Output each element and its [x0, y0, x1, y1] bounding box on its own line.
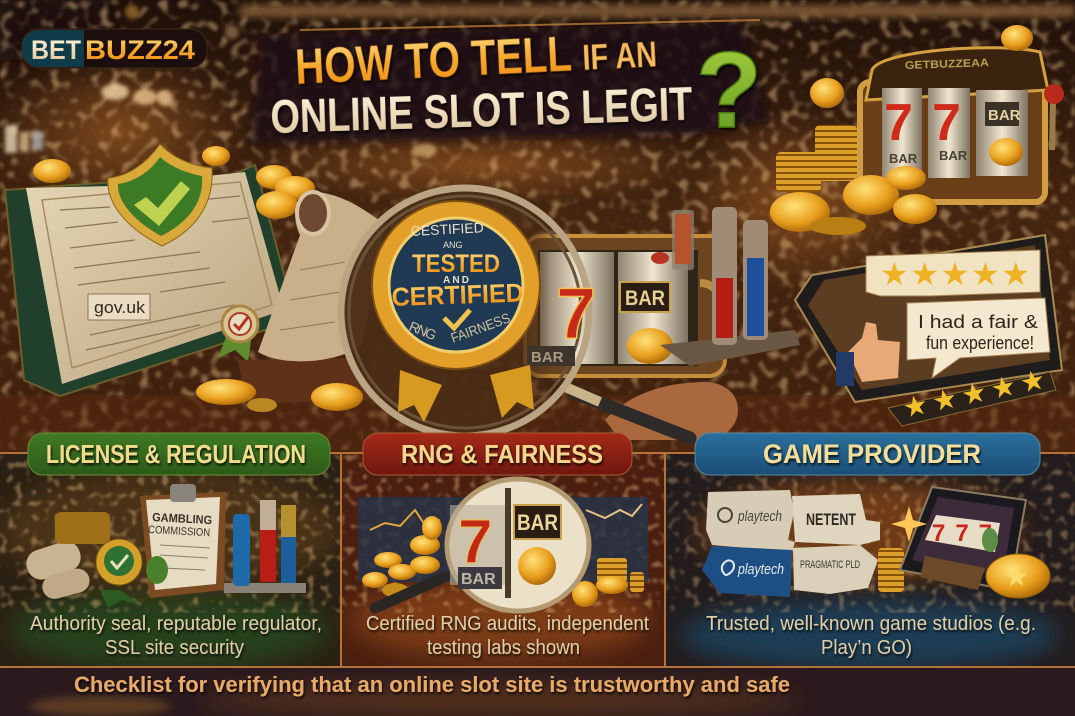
badge ribbons: [398, 365, 534, 422]
review bubble: [907, 298, 1050, 378]
frame lines: [0, 453, 1075, 667]
heading: rng & fairness: RNG & FAIRNESS: [401, 439, 603, 469]
heading: rng & fairness: [363, 433, 632, 475]
mobile phone: 777: [932, 520, 992, 547]
magnified reel bar: BAR: [531, 349, 564, 366]
reel symbols: BAR: [889, 151, 918, 166]
badge: [372, 201, 540, 369]
reel symbols: BAR: [939, 148, 968, 163]
reel symbols: 7: [932, 94, 961, 152]
review phone: [795, 235, 1062, 426]
scroll and wooden base: [196, 192, 385, 412]
question mark: ?: [696, 29, 762, 150]
central reel machine: [525, 236, 725, 376]
caption: rng: testing labs shown: [427, 637, 580, 659]
logo: BetBuzz24: BET: [31, 35, 81, 65]
coins: [362, 516, 644, 607]
logo: BetBuzz24: BUZZ24: [85, 35, 195, 65]
panel: game provider: [666, 453, 1075, 670]
panel: license & regulation: [0, 453, 341, 670]
coin stacks: [770, 125, 937, 235]
badge: ANG: [443, 240, 463, 250]
reel symbols: [884, 94, 1023, 166]
magnified reel bar: [527, 346, 575, 366]
coin with star: [986, 554, 1050, 598]
title line 2: ONLINE SLOT IS LEGIT: [270, 77, 693, 143]
rng illustration: [358, 479, 648, 611]
certificate illustration: [5, 144, 315, 396]
heading: game provider: GAME PROVIDER: [763, 439, 981, 469]
scrolls: [23, 512, 110, 602]
gov.uk label: [88, 294, 150, 320]
badge: CESTIFIED: [410, 219, 484, 239]
clipboard: gambling commission: GAMBLING: [152, 510, 212, 527]
review bubble: I had a fair &: [918, 312, 1038, 332]
heading: license & regulation: LICENSE & REGULATION: [46, 439, 306, 469]
heading: license & regulation: [28, 433, 330, 475]
badge: AND: [443, 275, 469, 286]
ribbon seal: [218, 306, 258, 362]
provider puzzle pieces: PRAGMATIC PLD: [800, 559, 860, 571]
rating bubble: ★★★★★: [880, 256, 1030, 292]
provider puzzle pieces: playtech: [737, 508, 782, 525]
thumbs up: [836, 322, 900, 386]
reel symbols: BAR: [988, 107, 1021, 124]
provider puzzle pieces: playtech: [737, 561, 784, 578]
test tubes: [660, 207, 800, 366]
magnified reel 7: 7: [556, 274, 596, 354]
tubes: [224, 500, 306, 593]
lens: 7: [458, 508, 492, 577]
caption: license: [30, 613, 322, 659]
lens: BAR: [517, 510, 558, 535]
heading: game provider: [695, 433, 1040, 475]
provider puzzle pieces: NETENT: [806, 510, 856, 529]
caption: provider: [706, 613, 1036, 659]
rng chart: [358, 497, 648, 582]
caption: license: SSL site security: [105, 637, 244, 659]
handle: [375, 577, 445, 608]
reel symbols: 7: [884, 94, 913, 152]
clipboard: gambling commission: [140, 484, 226, 598]
license illustration: [23, 484, 306, 608]
footer strip: Checklist for verifying that an online slot site is trustworthy and safe: [74, 672, 790, 697]
coin with star: ★: [1004, 561, 1029, 592]
hand: [605, 382, 738, 440]
logo: BetBuzz24: [22, 29, 207, 68]
lens: BAR: [461, 571, 496, 588]
star strip: ★★★★★: [900, 363, 1048, 424]
reel symbols: [620, 252, 673, 364]
title line 1: HOW TO TELL IF AN: [294, 21, 658, 95]
rating bubble: [866, 250, 1040, 296]
badge: TESTED: [412, 250, 500, 278]
reel symbols: BAR: [625, 287, 665, 310]
slot machine top right: [810, 25, 1064, 202]
gov.uk label: gov.uk: [94, 298, 146, 317]
lens: [447, 479, 589, 611]
mobile phone: [900, 487, 1026, 590]
footer strip: [0, 668, 1075, 716]
magnifier with certified badge: [341, 188, 738, 440]
authority seal: [96, 539, 168, 608]
badge: CERTIFIED: [391, 277, 524, 312]
review bubble: fun experience!: [926, 333, 1034, 353]
badge: RNG: [407, 318, 439, 343]
caption: license: Authority seal, reputable regulator,: [30, 613, 322, 635]
title banner: [250, 20, 770, 144]
caption: rng: Certified RNG audits, independent: [366, 613, 649, 635]
provider puzzle pieces: [702, 490, 904, 597]
caption: provider: Play’n GO): [821, 637, 912, 659]
slot machine top right: GETBUZZEAA: [905, 57, 989, 72]
coins near certificate: [33, 146, 315, 219]
shield with check: [108, 144, 212, 246]
clipboard: gambling commission: COMMISSION: [148, 524, 210, 539]
panel: rng & fairness: [342, 453, 665, 667]
caption: rng: [366, 613, 649, 659]
badge: FAIRNESS: [449, 310, 512, 346]
caption: provider: Trusted, well-known game studios (e.g.: [706, 613, 1036, 635]
